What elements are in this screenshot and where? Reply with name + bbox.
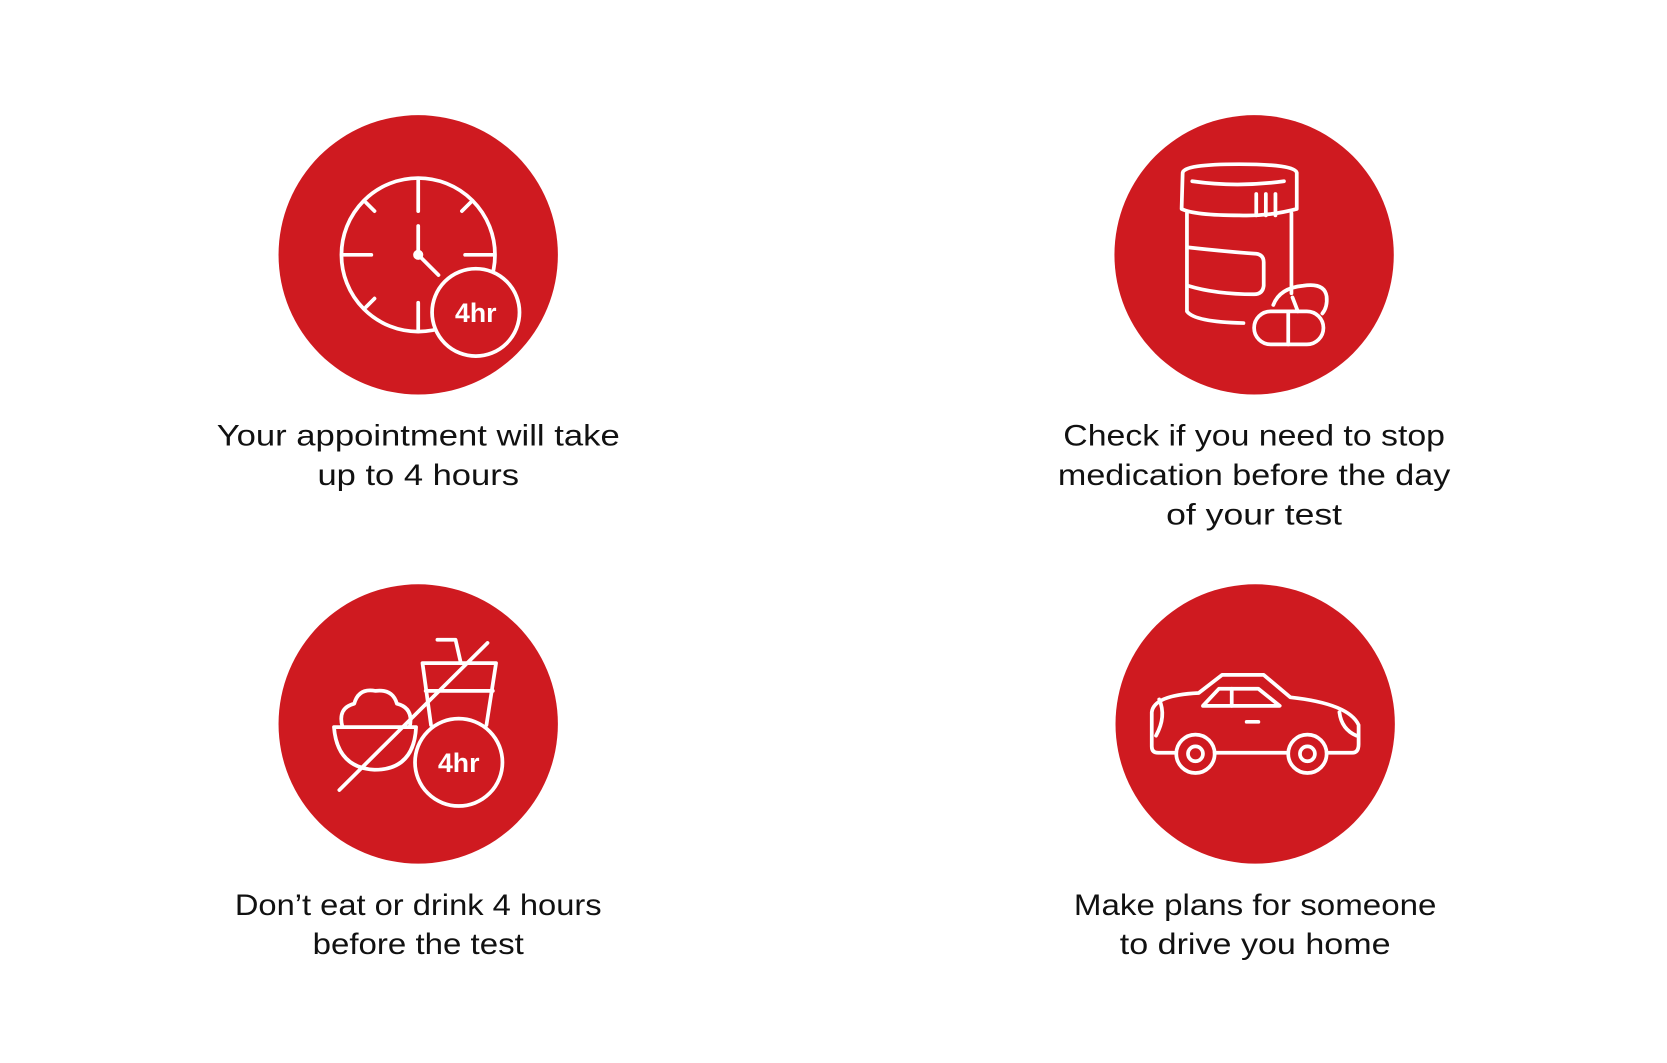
panel: transport	[1074, 584, 1436, 961]
icon: clock circle	[279, 115, 558, 394]
text: appointment caption: Your appointment will take	[217, 420, 620, 453]
panel: fasting	[235, 584, 602, 961]
text: fasting caption: Don’t eat or drink 4 hours	[235, 889, 602, 922]
icon: food and drink crossed out	[279, 584, 558, 864]
icon: pill bottle	[1114, 115, 1394, 394]
text: medication caption: Check if you need to stop	[1063, 420, 1445, 453]
text: fasting caption: before the test	[313, 928, 525, 961]
icon: car	[1116, 584, 1395, 864]
text: transport caption: to drive you home	[1120, 928, 1391, 961]
icon: clock circle: 4hr	[455, 298, 497, 328]
icon: food and drink crossed out: 4hr	[438, 748, 479, 778]
panel: medication	[1058, 115, 1450, 532]
text: medication caption: medication before the day	[1058, 459, 1450, 492]
panel: appointment duration	[217, 115, 620, 492]
text: appointment caption: up to 4 hours	[317, 459, 519, 492]
text: transport caption: Make plans for someone	[1074, 889, 1436, 922]
text: medication caption: of your test	[1166, 499, 1343, 532]
